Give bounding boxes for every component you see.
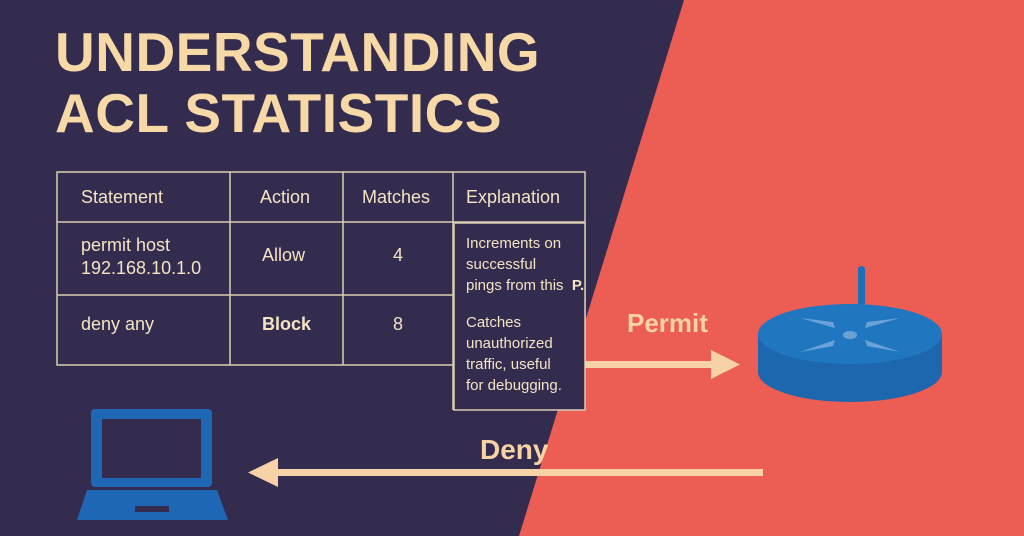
table: for debugging. <box>466 377 562 394</box>
table: unauthorized <box>466 335 553 352</box>
table: Allow <box>262 245 305 265</box>
arrow: deny <box>248 434 763 487</box>
table: 192.168.10.1.0 <box>81 258 201 278</box>
table: Catches <box>466 314 521 331</box>
table: Matches <box>362 187 430 207</box>
title <box>55 21 540 144</box>
table: Increments on <box>466 235 561 252</box>
table: Block <box>262 314 311 334</box>
table: Action <box>260 187 310 207</box>
table: successful <box>466 256 536 273</box>
title: ACL STATISTICS <box>55 82 502 144</box>
arrow: deny: Deny <box>480 434 548 465</box>
table: deny any <box>81 314 154 334</box>
icon: router <box>758 266 942 402</box>
table: permit host <box>81 235 170 255</box>
icon: laptop <box>77 409 228 520</box>
title: UNDERSTANDING <box>55 21 540 83</box>
table: 4 <box>393 245 403 265</box>
arrow: permit: Permit <box>627 308 708 338</box>
table: Explanation <box>466 187 560 207</box>
table: traffic, useful <box>466 356 551 373</box>
arrow: permit <box>585 308 740 379</box>
table: Statement <box>81 187 163 207</box>
table: pings from this P. <box>466 277 584 294</box>
table: 8 <box>393 314 403 334</box>
